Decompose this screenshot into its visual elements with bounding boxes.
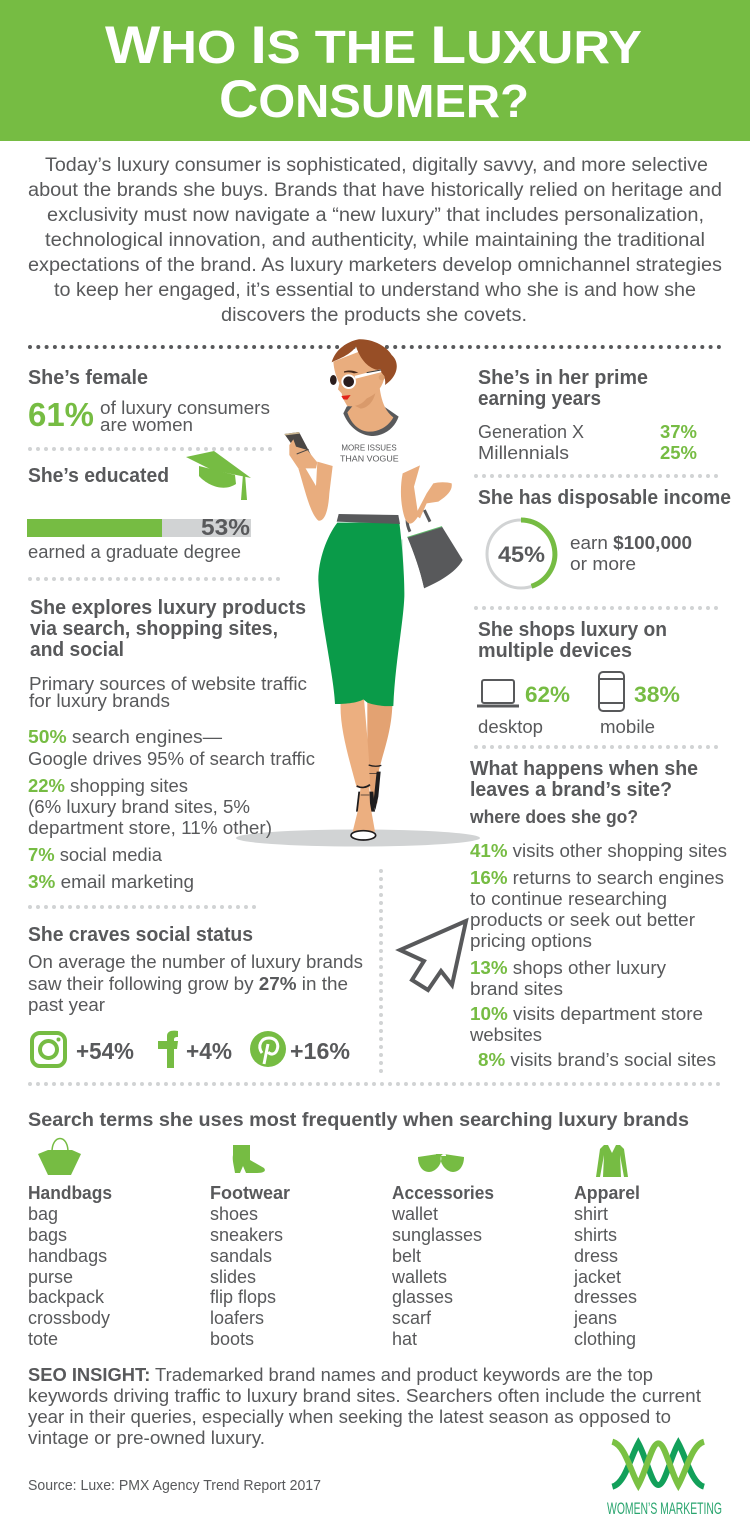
- panel: explores luxury products: via search, shopping sites,: [30, 618, 278, 640]
- panel: she's female: [28, 367, 270, 435]
- panel: craves social status: saw their following grow by 27% in the: [28, 974, 348, 994]
- column: accessories: glasses: [392, 1287, 453, 1307]
- column: apparel: dresses: [574, 1287, 637, 1307]
- title banner: WHO IS THE LUXURY: [105, 16, 642, 75]
- panel: leaves a brand's site: websites: [469, 1025, 542, 1045]
- panel: leaves a brand's site: 41% visits other shopping sites: [470, 841, 727, 861]
- column: accessories: sunglasses: [392, 1225, 482, 1245]
- column: footwear: boots: [210, 1329, 254, 1349]
- handbag: [398, 502, 463, 595]
- icon: facebook: [158, 1031, 178, 1068]
- icon: sunglasses: [418, 1154, 464, 1172]
- column: handbags: tote: [28, 1329, 58, 1349]
- column: handbags: purse: [28, 1267, 73, 1287]
- panel: craves social status: +16%: [290, 1038, 350, 1064]
- intro paragraph: expectations of the brand. As luxury marketers develop omnichannel strategies: [28, 255, 722, 276]
- logo: women's marketing: [607, 1442, 722, 1518]
- panel: multiple devices: 62%: [525, 682, 570, 707]
- column: handbags: [28, 1138, 112, 1349]
- column: handbags: bag: [28, 1204, 58, 1224]
- panel: prime earning years: She’s in her prime: [478, 367, 648, 389]
- phone and hand: [284, 432, 317, 468]
- panel: leaves a brand's site: 10% visits department store: [470, 1004, 703, 1024]
- column: accessories: wallet: [391, 1204, 438, 1224]
- panel: leaves a brand's site: products or seek out better: [470, 910, 695, 930]
- panel: prime earning years: [478, 367, 697, 463]
- column: accessories: belt: [392, 1246, 421, 1266]
- column: accessories: wallets: [391, 1267, 447, 1287]
- column: accessories: Accessories: [392, 1183, 494, 1203]
- shirt slogan: THAN VOGUE: [340, 453, 399, 463]
- panel: she's educated: earned a graduate degree: [28, 542, 241, 562]
- panel: craves social status: +4%: [186, 1038, 232, 1064]
- head: [330, 339, 397, 406]
- icon: cursor arrow: [400, 921, 466, 990]
- intro paragraph: about the brands she buys. Brands that have historically relied on heritage and: [28, 180, 722, 201]
- panel: multiple devices: multiple devices: [478, 640, 632, 662]
- intro paragraph: [28, 155, 722, 326]
- donut chart: 45%: [487, 520, 555, 588]
- column: apparel: clothing: [574, 1329, 636, 1349]
- panel: multiple devices: desktop: [478, 717, 543, 737]
- panel: multiple devices: 38%: [634, 682, 680, 707]
- column: footwear: Footwear: [210, 1183, 290, 1203]
- panel: prime earning years: Millennials: [478, 443, 569, 463]
- panel: explores luxury products: for luxury brands: [29, 691, 170, 711]
- column: accessories: hat: [392, 1329, 417, 1349]
- panel: explores luxury products: 22% shopping sites: [28, 776, 188, 796]
- icon: pinterest: [250, 1031, 286, 1067]
- panel: craves social status: She craves social status: [28, 924, 253, 946]
- panel: leaves a brand's site: 8% visits brand’s social sites: [478, 1050, 716, 1070]
- icon: laptop: [477, 680, 519, 706]
- panel: explores luxury products: 7% social media: [28, 845, 163, 865]
- column: footwear: loafers: [210, 1308, 264, 1328]
- icon: boot: [233, 1145, 265, 1173]
- panel: she's educated: [27, 451, 251, 562]
- SEO insight: year in their queries, especially when seeking the latest season as opposed to: [28, 1407, 671, 1427]
- panel: explores luxury products: 3% email marketing: [28, 872, 194, 892]
- column: apparel: Apparel: [574, 1183, 640, 1203]
- panel: leaves a brand's site: 13% shops other luxury: [470, 958, 666, 978]
- shoes: [351, 765, 381, 840]
- panel: craves social status: [28, 924, 363, 1068]
- panel: she's female: 61%: [28, 396, 94, 433]
- panel: leaves a brand's site: pricing options: [470, 931, 592, 951]
- column: footwear: slides: [210, 1267, 256, 1287]
- panel: explores luxury products: (6% luxury brand sites, 5%: [28, 797, 250, 817]
- icon: graduation cap: [186, 451, 251, 500]
- panel: explores luxury products: Primary sources of website traffic: [29, 674, 307, 694]
- column: apparel: jacket: [573, 1267, 621, 1287]
- intro paragraph: Today’s luxury consumer is sophisticated, digitally savvy, and more selective: [45, 155, 708, 176]
- panel: disposable income: [478, 487, 731, 588]
- intro paragraph: exclusivity must now navigate a “new luxury” that includes personalization,: [47, 205, 704, 226]
- panel: disposable income: or more: [570, 554, 636, 574]
- source: Source: Luxe: PMX Agency Trend Report 2017: [28, 1478, 321, 1494]
- column: apparel: shirts: [574, 1225, 617, 1245]
- panel: craves social status: +54%: [76, 1038, 134, 1064]
- panel: leaves a brand's site: where does she go?: [469, 807, 638, 827]
- panel: explores luxury products: She explores luxury products: [30, 597, 306, 619]
- intro paragraph: technological innovation, and authenticity, while maintaining the traditional: [45, 230, 705, 251]
- intro paragraph: to keep her engaged, it’s essential to understand who she is and how she: [54, 280, 696, 301]
- icon: phone: [599, 672, 624, 711]
- column: apparel: [573, 1145, 640, 1349]
- panel: prime earning years: 37%: [660, 422, 697, 442]
- panel: explores luxury products: [28, 597, 315, 892]
- panel: explores luxury products: department store, 11% other): [28, 818, 272, 838]
- column: apparel: jeans: [573, 1308, 617, 1328]
- icon: jacket: [596, 1145, 628, 1177]
- panel: leaves a brand's site: leaves a brand’s site?: [470, 779, 672, 801]
- donut chart: 45%: 45%: [498, 542, 545, 567]
- panel: explores luxury products: and social: [30, 639, 124, 661]
- column: handbags: crossbody: [28, 1308, 110, 1328]
- panel: disposable income: She has disposable income: [478, 487, 731, 509]
- skirt and legs: [318, 514, 404, 803]
- panel: she's female: She’s female: [28, 367, 148, 389]
- panel: craves social status: On average the number of luxury brands: [28, 952, 363, 972]
- icon: handbag: [38, 1138, 81, 1175]
- column: handbags: bags: [28, 1225, 67, 1245]
- column: handbags: Handbags: [28, 1183, 112, 1203]
- panel: disposable income: earn $100,000: [570, 533, 692, 553]
- arms: [298, 462, 452, 524]
- title banner: [0, 0, 750, 141]
- shadow under figure: [236, 830, 480, 846]
- panel: craves social status: past year: [28, 995, 105, 1015]
- illustration: woman with phone and handbag: [284, 339, 463, 840]
- column: footwear: sandals: [210, 1246, 272, 1266]
- icon: instagram: [32, 1033, 65, 1066]
- panel: she's female: are women: [100, 415, 193, 435]
- panel: she's female: of luxury consumers: [100, 398, 270, 418]
- column: accessories: scarf: [392, 1308, 432, 1328]
- shirt slogan: [340, 443, 399, 463]
- SEO insight: [28, 1365, 701, 1448]
- panel: leaves a brand's site: 16% returns to search engines: [470, 868, 724, 888]
- neck and collar: [343, 385, 399, 436]
- column: handbags: handbags: [28, 1246, 107, 1266]
- column: accessories: [391, 1154, 494, 1349]
- intro paragraph: discovers the products she covets.: [221, 305, 527, 326]
- column: apparel: shirt: [574, 1204, 608, 1224]
- panel: leaves a brand's site: What happens when she: [470, 758, 698, 780]
- panel: multiple devices: She shops luxury on: [478, 619, 667, 641]
- SEO insight: keywords driving traffic to luxury brand sites. Searchers often include the current: [28, 1386, 701, 1406]
- title banner: CONSUMER?: [219, 70, 529, 129]
- column: handbags: backpack: [28, 1287, 105, 1307]
- heading: search terms: Search terms she uses most frequently when searching luxury brands: [28, 1109, 689, 1131]
- SEO insight: SEO INSIGHT: Trademarked brand names and product keywords are the top: [28, 1365, 653, 1385]
- panel: leaves a brand's site: to continue researching: [470, 889, 667, 909]
- bar: 53%: [27, 514, 251, 540]
- panel: explores luxury products: Google drives 95% of search traffic: [28, 749, 315, 769]
- column: footwear: shoes: [210, 1204, 258, 1224]
- column: footwear: sneakers: [210, 1225, 283, 1245]
- panel: leaves a brand's site: [469, 758, 727, 1070]
- bar: 53%: 53%: [201, 514, 250, 540]
- panel: prime earning years: Generation X: [478, 422, 584, 442]
- panel: leaves a brand's site: brand sites: [470, 979, 563, 999]
- column: footwear: flip flops: [210, 1287, 276, 1307]
- panel: multiple devices: mobile: [600, 717, 655, 737]
- panel: explores luxury products: 50% search engines—: [28, 727, 222, 747]
- panel: prime earning years: earning years: [478, 388, 601, 410]
- SEO insight: vintage or pre-owned luxury.: [28, 1428, 265, 1448]
- column: footwear: [210, 1145, 290, 1349]
- panel: prime earning years: 25%: [660, 443, 697, 463]
- panel: she's educated: She’s educated: [28, 465, 169, 487]
- column: apparel: dress: [574, 1246, 618, 1266]
- panel: multiple devices: [477, 619, 680, 737]
- shirt slogan: MORE ISSUES: [341, 443, 397, 453]
